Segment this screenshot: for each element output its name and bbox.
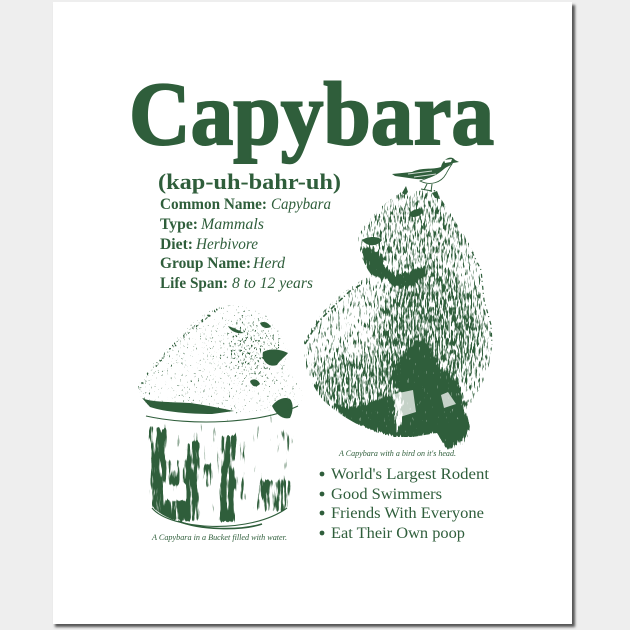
facts list bbox=[160, 196, 331, 292]
fact: group name: Group Name: bbox=[160, 255, 251, 272]
fact: diet: Diet: bbox=[160, 236, 193, 253]
fact: common name: Capybara bbox=[271, 196, 331, 213]
fact: type: Type: bbox=[160, 216, 198, 233]
illustration: capybara in a bucket bbox=[138, 305, 303, 530]
fact: diet bbox=[160, 236, 258, 253]
bucket staves bbox=[150, 425, 290, 522]
capybara body texture bbox=[304, 190, 492, 450]
bird bbox=[392, 158, 459, 192]
eye bbox=[408, 207, 424, 219]
bullet list bbox=[320, 466, 490, 542]
sparse back outline bbox=[305, 284, 362, 344]
ears bbox=[402, 186, 440, 199]
muzzle shadows bbox=[250, 322, 288, 386]
leg highlights bbox=[394, 390, 456, 417]
pronunciation: (kap-uh-bahr-uh) bbox=[158, 169, 341, 194]
bullet: friends: Friends With Everyone bbox=[331, 505, 484, 522]
capybara texture bbox=[138, 305, 303, 414]
eye bbox=[228, 326, 244, 333]
bullet: poop: Eat Their Own poop bbox=[331, 525, 465, 542]
bullet: largest rodent: World's Largest Rodent bbox=[331, 466, 490, 483]
bucket rim and base bbox=[146, 406, 298, 526]
bullet: swimmers: Good Swimmers bbox=[331, 486, 442, 503]
fact: diet: Herbivore bbox=[195, 236, 258, 253]
nostril bbox=[362, 237, 382, 245]
fact: common name bbox=[160, 196, 331, 213]
fact: group name: Herd bbox=[252, 255, 285, 272]
fact: type: Mammals bbox=[200, 216, 264, 233]
fact: life span bbox=[160, 275, 313, 292]
caption: bird capybara: A Capybara with a bird on it's head. bbox=[338, 448, 456, 458]
solid shadows: muzzle, neck, belly bbox=[330, 248, 469, 450]
fact: life span: Life Span: bbox=[160, 275, 228, 292]
title: Capybara bbox=[129, 65, 494, 164]
fact: life span: 8 to 12 years bbox=[232, 275, 313, 292]
water line and rim shadows bbox=[142, 398, 293, 418]
illustration: capybara with bird bbox=[304, 158, 493, 450]
fact: common name: Common Name: bbox=[160, 196, 267, 213]
fact: type bbox=[160, 216, 264, 233]
caption: bucket capybara: A Capybara in a Bucket filled with water. bbox=[151, 532, 287, 542]
